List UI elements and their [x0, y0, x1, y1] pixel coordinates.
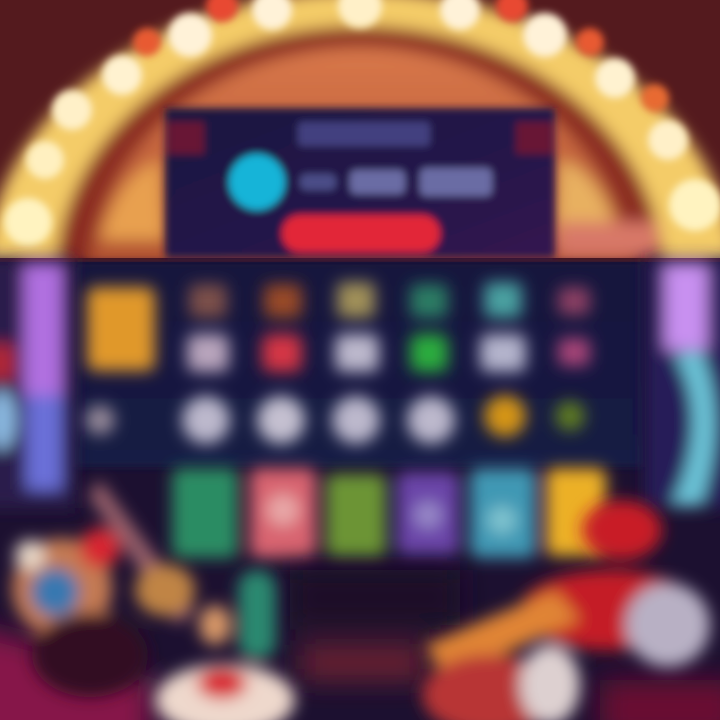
bottom cards: [172, 468, 606, 558]
left foreground chips: [12, 480, 295, 720]
cyan coin icon: [229, 154, 285, 210]
panel title: [298, 122, 430, 146]
panel text: [300, 168, 492, 196]
right foreground chips: [422, 500, 710, 720]
symbol grid panel: [75, 262, 643, 467]
bulbs: [4, 0, 720, 246]
lower stage: [0, 570, 720, 720]
panel corners: [168, 122, 204, 154]
arch with lights: [0, 0, 720, 258]
grid symbols: [85, 282, 590, 444]
top panel: [165, 108, 555, 258]
red button: [282, 215, 440, 252]
side pillars: [0, 258, 720, 508]
